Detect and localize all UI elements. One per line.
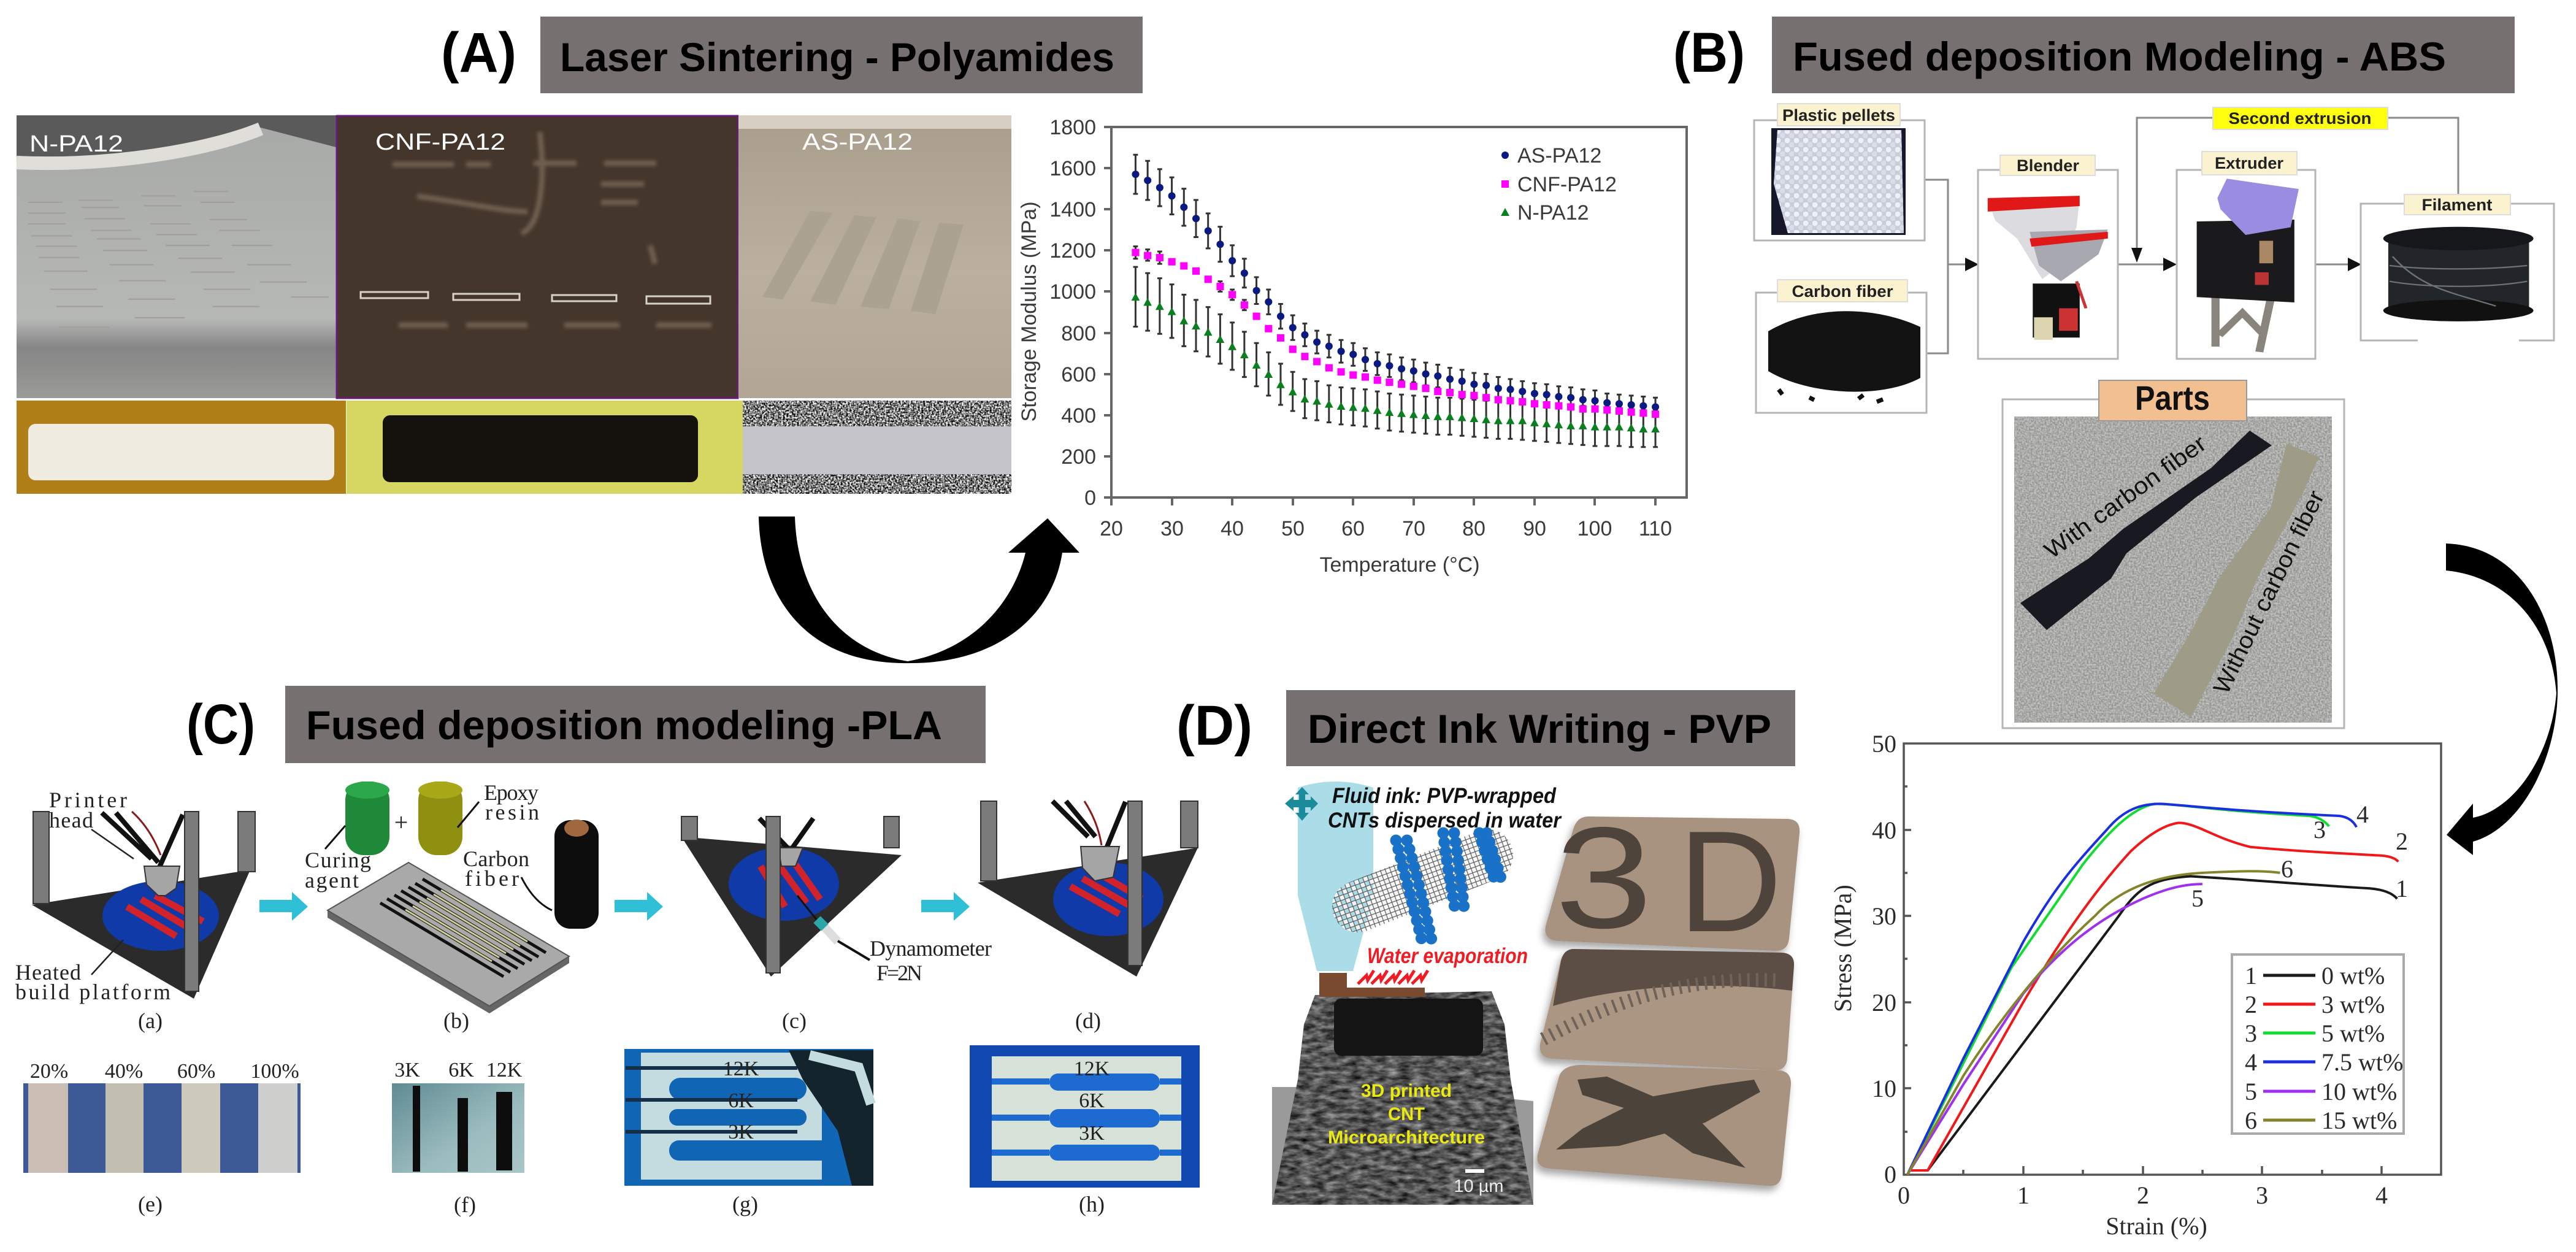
plot frame and ticks	[1104, 127, 1687, 505]
x axis labels: 20	[1100, 517, 1123, 540]
data series with error bars	[1132, 155, 1660, 447]
axis labels: 50	[1872, 730, 1896, 758]
printed brown ink	[1319, 973, 1425, 997]
photo f: fiber tows: 12K	[486, 1059, 523, 1081]
icon: teal cross arrows	[1285, 787, 1318, 821]
chart: storage modulus vs temperature	[1018, 116, 1687, 577]
photo: CNF-PA12 powder bed: CNF-PA12	[375, 129, 505, 155]
photo: CNF-PA12 part	[347, 401, 743, 494]
legend: 5	[2245, 1078, 2257, 1105]
specimen labels	[2040, 431, 2329, 698]
step a: printer: build platform	[15, 980, 171, 1004]
y axis labels: 1600	[1049, 157, 1096, 180]
legend: CNF-PA12	[1517, 173, 1617, 196]
curve labels: 5	[2191, 885, 2204, 912]
3D model: printed helix	[1540, 949, 1794, 1070]
arrow b to c	[615, 892, 663, 921]
ink description: Fluid ink: PVP-wrapped	[1332, 784, 1557, 808]
arrow: parts to stress chart	[2446, 543, 2558, 855]
photo h: finished specimens	[970, 1045, 1200, 1216]
step b: impregnating carbon fiber: agent	[305, 868, 359, 893]
legend	[2232, 954, 2404, 1134]
photo e: infill densities: 60%	[177, 1060, 215, 1083]
heading B: Fused deposition Modeling - ABS	[1793, 34, 2446, 79]
axis labels: 1	[2017, 1181, 2030, 1209]
axis titles	[1018, 201, 1480, 577]
heading A	[540, 17, 1143, 93]
curve labels: 1	[2396, 875, 2408, 902]
step captions a to d	[138, 1008, 1101, 1033]
3D model: printed 3D letters: D	[1678, 801, 1782, 962]
photo g: printing specimens: 3K	[728, 1121, 754, 1143]
y axis labels: 400	[1061, 404, 1096, 428]
legend: 10 wt%	[2321, 1078, 2397, 1105]
SEM image: printed CNT microarchitecture: CNT	[1388, 1104, 1425, 1124]
black specimen with carbon fiber	[2020, 431, 2272, 630]
photo: N-PA12 powder bed: N-PA12	[29, 131, 123, 157]
legend: 5 wt%	[2321, 1020, 2385, 1047]
axis labels: 0	[1898, 1181, 1910, 1209]
axis labels: 0	[1884, 1161, 1896, 1188]
carbon fiber box	[1756, 280, 1926, 413]
extruder box: Extruder	[2215, 154, 2283, 172]
photo f: fiber tows: (f)	[454, 1192, 476, 1217]
axis labels: Strain (%)	[2106, 1212, 2207, 1240]
curve labels: 2	[2396, 828, 2408, 855]
axis labels: 2	[2137, 1181, 2149, 1209]
filament box	[2361, 194, 2554, 340]
SEM image: printed CNT microarchitecture: 10 µm	[1454, 1177, 1504, 1196]
3D model: printed 3D letters	[1545, 797, 1800, 962]
photo: AS-PA12 powder bed	[738, 115, 1011, 398]
photo e: infill densities: 20%	[30, 1060, 68, 1083]
parts photo box: Parts	[2135, 378, 2210, 417]
legend: 1	[2245, 962, 2257, 989]
photo f: fiber tows: 6K	[448, 1059, 474, 1081]
axis labels: 20	[1872, 989, 1896, 1016]
parts photo box	[2003, 378, 2344, 728]
photo e: infill densities: 40%	[105, 1060, 143, 1083]
ink description	[1328, 784, 1562, 832]
photo h: finished specimens: 12K	[1074, 1058, 1110, 1080]
x axis labels: 90	[1523, 517, 1546, 540]
axis labels: 4	[2375, 1181, 2388, 1209]
legend: 2	[2245, 991, 2257, 1018]
curve labels: 3	[2313, 816, 2326, 843]
y axis labels: 800	[1061, 322, 1096, 345]
water evaporation label: Water evaporation	[1367, 944, 1528, 968]
plastic pellets box: Plastic pellets	[1782, 106, 1895, 125]
axis titles: Temperature (°C)	[1319, 553, 1480, 577]
y axis labels: 0	[1084, 486, 1096, 510]
step captions a to d: (a)	[138, 1008, 163, 1033]
icon: evaporation arrows	[1358, 970, 1428, 984]
step captions a to d: (c)	[782, 1008, 807, 1033]
blender box: Blender	[2017, 156, 2079, 175]
panel: D direct ink writing PVP	[1176, 690, 1800, 1205]
second extrusion label	[2213, 107, 2388, 129]
ink description: CNTs dispersed in water	[1328, 808, 1562, 832]
x axis labels: 70	[1402, 517, 1425, 540]
x axis labels: 80	[1462, 517, 1485, 540]
x axis labels: 110	[1639, 517, 1672, 540]
filament box: Filament	[2421, 196, 2493, 214]
y axis labels: 1400	[1049, 198, 1096, 221]
panel: B fused deposition modeling ABS	[1673, 17, 2558, 1240]
photo: N-PA12 part on wood	[17, 401, 346, 494]
axis labels: Stress (MPa)	[1829, 885, 1857, 1012]
arrowheads	[1965, 248, 2361, 271]
photo g: printing specimens: (g)	[732, 1192, 758, 1216]
x axis labels: 50	[1281, 517, 1305, 540]
arrow a to b	[259, 892, 308, 921]
step a: printer	[15, 788, 255, 1004]
second extrusion label: Second extrusion	[2229, 109, 2371, 128]
curve labels	[2191, 801, 2408, 912]
plastic pellets box	[1754, 104, 1925, 240]
chart: stress vs strain	[1829, 730, 2441, 1240]
legend: AS-PA12	[1517, 144, 1601, 167]
photo g: printing specimens	[624, 1049, 873, 1216]
photo e: infill densities	[23, 1060, 301, 1216]
panel label C: (C)	[186, 693, 255, 756]
axis labels: 10	[1872, 1075, 1896, 1102]
photo g: printing specimens: 6K	[728, 1089, 754, 1112]
curve labels: 6	[2281, 855, 2293, 883]
specimen labels: With carbon fiber	[2040, 431, 2212, 564]
step a: printer: Heated	[15, 960, 81, 985]
y axis labels: 200	[1061, 445, 1096, 469]
y axis labels: 1800	[1049, 116, 1096, 139]
step b: impregnating carbon fiber: +	[394, 808, 408, 836]
step b: impregnating carbon fiber: Carbon	[463, 847, 529, 871]
step b: impregnating carbon fiber: Curing	[305, 848, 371, 872]
photo f: fiber tows: 3K	[394, 1059, 420, 1081]
blender box	[1978, 155, 2118, 359]
legend: 3 wt%	[2321, 991, 2385, 1018]
step b: impregnating carbon fiber	[305, 780, 599, 1013]
step b: impregnating carbon fiber: fiber	[465, 866, 519, 891]
legend: 6	[2245, 1107, 2257, 1134]
extruder box	[2177, 152, 2315, 359]
tan specimen without carbon fiber	[2154, 444, 2319, 717]
y axis labels: 1000	[1049, 280, 1096, 304]
stress curves	[1907, 804, 2398, 1175]
axis titles: Storage Modulus (MPa)	[1018, 201, 1041, 422]
photo: AS-PA12 part	[743, 401, 1011, 494]
specimen labels: Without carbon fiber	[2209, 486, 2329, 698]
heading A: Laser Sintering - Polyamides	[560, 34, 1114, 80]
legend: 3	[2245, 1020, 2257, 1047]
step c: printer with dynamometer: Dynamometer	[870, 936, 992, 961]
heading C: Fused deposition modeling -PLA	[306, 702, 942, 748]
step c: printer with dynamometer: F=2N	[876, 961, 922, 985]
x axis labels	[1100, 517, 1672, 540]
heading D: Direct Ink Writing - PVP	[1308, 706, 1771, 751]
carbon fiber box: Carbon fiber	[1792, 282, 1893, 301]
axis labels: 30	[1872, 902, 1896, 930]
legend: 15 wt%	[2321, 1107, 2397, 1134]
panel: C fused deposition modeling PLA	[15, 686, 1200, 1217]
photo: AS-PA12 powder bed: AS-PA12	[802, 129, 913, 155]
heading D	[1286, 690, 1795, 766]
arrow: A photos to chart	[759, 517, 1079, 663]
step captions a to d: (d)	[1075, 1008, 1101, 1033]
x axis labels: 30	[1160, 517, 1184, 540]
step captions a to d: (b)	[443, 1008, 469, 1033]
photo e: infill densities: 100%	[250, 1060, 299, 1083]
step c: printer with dynamometer	[681, 816, 992, 985]
photo f: fiber tows	[392, 1059, 524, 1217]
step a: printer: head	[49, 808, 93, 832]
SEM image: printed CNT microarchitecture: Microarchitecture	[1328, 1127, 1485, 1148]
curve labels: 4	[2356, 801, 2369, 828]
axis labels: 40	[1872, 816, 1896, 844]
plot frame and ticks	[1904, 743, 2441, 1175]
3D model: printed 3D letters: 3	[1555, 797, 1652, 958]
heading B	[1772, 17, 2515, 93]
heading C	[285, 686, 986, 763]
x axis labels: 40	[1221, 517, 1244, 540]
3D model: printed X shape	[1537, 1065, 1791, 1186]
SEM image: printed CNT microarchitecture: 3D printed	[1361, 1081, 1452, 1101]
legend: N-PA12	[1517, 201, 1589, 225]
axis labels	[1829, 730, 2388, 1240]
step b: impregnating carbon fiber: Epoxy	[484, 780, 539, 805]
photo: N-PA12 powder bed	[17, 115, 336, 398]
photo e: infill densities: (e)	[138, 1192, 163, 1216]
process flow connectors	[1925, 118, 2458, 353]
nozzle	[1298, 782, 1373, 971]
panel label A: (A)	[441, 21, 516, 84]
photo h: finished specimens: 3K	[1079, 1122, 1105, 1145]
y axis labels: 1200	[1049, 239, 1096, 263]
legend	[1501, 144, 1617, 225]
photo h: finished specimens: 6K	[1079, 1089, 1105, 1112]
SEM image: printed CNT microarchitecture	[1272, 991, 1533, 1205]
step d: printer printing specimens	[978, 801, 1198, 977]
y axis labels	[1049, 116, 1096, 510]
photo g: printing specimens: 12K	[723, 1058, 759, 1080]
carbon nanotube with PVP	[1358, 833, 1503, 940]
step a: printer: Printer	[49, 788, 127, 812]
legend: 4	[2245, 1048, 2257, 1076]
y axis labels: 600	[1061, 363, 1096, 386]
legend: 0 wt%	[2321, 962, 2385, 989]
photo h: finished specimens: (h)	[1079, 1192, 1105, 1216]
photo: CNF-PA12 powder bed	[337, 116, 738, 398]
legend: 7.5 wt%	[2321, 1048, 2403, 1076]
axis labels: 3	[2256, 1181, 2268, 1209]
panel: A laser sintering polyamides	[17, 17, 1687, 663]
x axis labels: 60	[1341, 517, 1365, 540]
panel label B: (B)	[1673, 21, 1745, 84]
panel label D: (D)	[1176, 694, 1252, 757]
step b: impregnating carbon fiber: resin	[485, 800, 539, 824]
arrow c to d	[921, 892, 970, 921]
x axis labels: 100	[1577, 517, 1612, 540]
